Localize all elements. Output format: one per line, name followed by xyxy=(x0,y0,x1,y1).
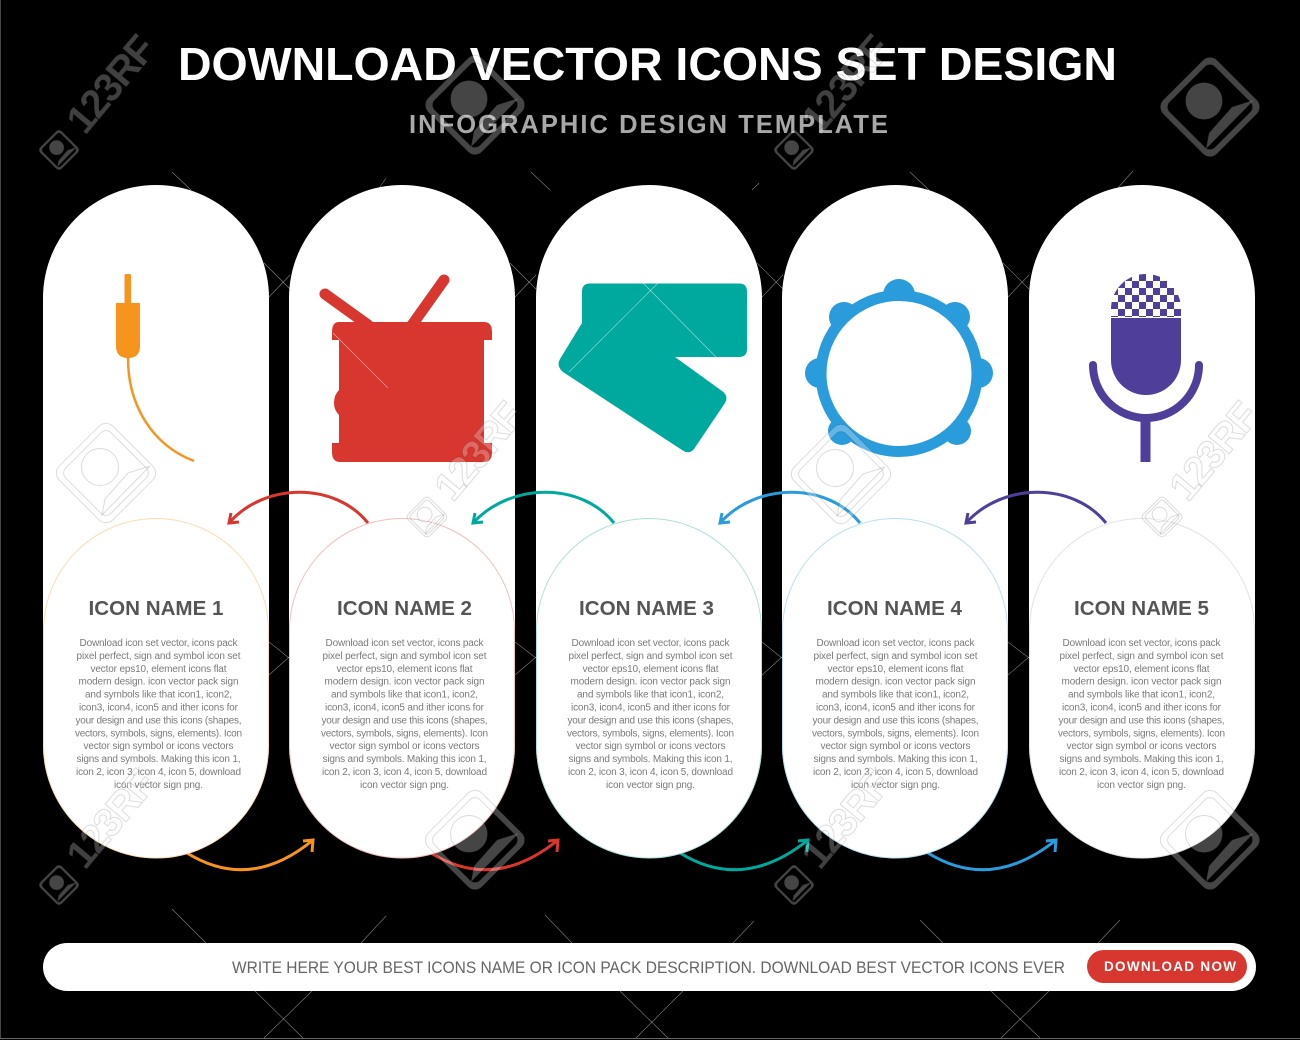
description 4: modern design. icon vector pack sign xyxy=(816,677,976,688)
description 1: icon vector sign png. xyxy=(114,780,203,791)
description 3: signs and symbols. Making this icon 1, xyxy=(568,754,732,765)
heading: icon name 4: ICON NAME 4 xyxy=(827,597,963,620)
subtitle: INFOGRAPHIC DESIGN TEMPLATE xyxy=(409,111,888,139)
description 1: icon3, icon4, icon5 and ither icons for xyxy=(79,702,239,714)
heading: icon name 2: ICON NAME 2 xyxy=(337,597,472,620)
description 2: vectors, symbols, signs, elements). Icon xyxy=(321,728,488,739)
watermark overlay: 123RF xyxy=(793,27,900,142)
description 4: icon vector sign png. xyxy=(851,780,940,791)
description 1 xyxy=(75,638,242,791)
description 3: vector eps10, element icons flat xyxy=(582,664,719,675)
footer bar xyxy=(43,943,1256,991)
description 3: vector sign symbol or icons vectors xyxy=(576,741,726,752)
footer text: WRITE HERE YOUR BEST ICONS NAME OR ICON PACK DESCRIPTION. DOWNLOAD BEST VECTOR ICONS EVER xyxy=(232,958,1065,977)
description 3: icon vector sign png. xyxy=(606,780,695,791)
description 3: icon 2, icon 3, icon 4, icon 5, download xyxy=(568,767,733,778)
description 4: icon 2, icon 3, icon 4, icon 5, download xyxy=(813,767,978,778)
description 5: vectors, symbols, signs, elements). Icon xyxy=(1058,728,1225,739)
description 1: modern design. icon vector pack sign xyxy=(78,677,238,688)
icon: teal tickets xyxy=(559,283,747,452)
description 2: icon vector sign png. xyxy=(360,780,449,791)
description 4: pixel perfect, sign and symbol icon set xyxy=(814,651,978,662)
description 4: icon3, icon4, icon5 and ither icons for xyxy=(816,702,976,714)
description 2: icon 2, icon 3, icon 4, icon 5, download xyxy=(322,767,487,778)
description 4: vector eps10, element icons flat xyxy=(828,664,964,675)
watermark overlay: 123RF xyxy=(58,27,165,142)
icon: tambourine xyxy=(805,279,993,452)
heading: icon name 3: ICON NAME 3 xyxy=(579,597,714,620)
icon: microphone xyxy=(1093,274,1199,462)
description 3: your design and use this icons (shapes, xyxy=(568,715,734,726)
description 4: signs and symbols. Making this icon 1, xyxy=(814,754,978,765)
description 2: icon3, icon4, icon5 and ither icons for xyxy=(325,702,485,714)
description 5: modern design. icon vector pack sign xyxy=(1062,677,1222,688)
arrow: bottom red xyxy=(431,840,558,870)
panel 2 xyxy=(289,185,515,858)
arrow: top purple xyxy=(966,492,1106,523)
description 5: vector eps10, element icons flat xyxy=(1074,664,1210,675)
arrow: bottom orange xyxy=(187,840,313,870)
description 1: vector eps10, element icons flat xyxy=(90,664,227,675)
description 1: vector sign symbol or icons vectors xyxy=(84,741,234,752)
title: DOWNLOAD VECTOR ICONS SET DESIGN xyxy=(178,38,1117,90)
description 3 xyxy=(567,638,734,791)
panel 1 xyxy=(43,185,269,858)
description 2: and symbols like that icon1, icon2, xyxy=(331,690,478,701)
description 5: icon vector sign png. xyxy=(1097,780,1186,791)
text card 2 xyxy=(290,518,514,858)
description 3: vectors, symbols, signs, elements). Icon xyxy=(567,728,734,739)
panel 3 xyxy=(536,185,762,858)
description 4: your design and use this icons (shapes, xyxy=(812,715,978,726)
description 2: vector sign symbol or icons vectors xyxy=(330,741,480,752)
download button: DOWNLOAD NOW xyxy=(1104,959,1236,974)
arrow: bottom teal xyxy=(680,840,808,870)
description 5: signs and symbols. Making this icon 1, xyxy=(1060,754,1224,765)
watermark overlay: 123RF xyxy=(58,762,165,877)
description 3: pixel perfect, sign and symbol icon set xyxy=(568,651,733,662)
description 5: vector sign symbol or icons vectors xyxy=(1066,741,1216,752)
description 1: your design and use this icons (shapes, xyxy=(76,715,242,726)
description 3: Download icon set vector, icons pack xyxy=(572,638,730,649)
description 2: pixel perfect, sign and symbol icon set xyxy=(322,651,487,662)
description 1: signs and symbols. Making this icon 1, xyxy=(76,754,240,765)
description 4: vector sign symbol or icons vectors xyxy=(820,741,970,752)
description 5: Download icon set vector, icons pack xyxy=(1062,638,1222,649)
description 5: your design and use this icons (shapes, xyxy=(1058,715,1224,726)
arrow: top blue xyxy=(720,492,860,523)
watermark overlay: 123RF xyxy=(426,394,533,509)
watermark overlay: 123RF xyxy=(793,762,900,877)
description 1: and symbols like that icon1, icon2, xyxy=(85,690,232,701)
download button xyxy=(1087,950,1247,983)
description 2: modern design. icon vector pack sign xyxy=(324,677,484,688)
arrow: bottom blue xyxy=(928,840,1056,870)
arrow: top teal xyxy=(473,492,614,523)
description 2: vector eps10, element icons flat xyxy=(336,664,473,675)
text card 1 xyxy=(44,518,268,858)
icon: drum xyxy=(325,280,492,462)
description 1: pixel perfect, sign and symbol icon set xyxy=(76,651,241,662)
text card 4 xyxy=(782,518,1008,858)
description 5: and symbols like that icon1, icon2, xyxy=(1068,690,1215,701)
description 5: pixel perfect, sign and symbol icon set xyxy=(1060,651,1224,662)
arrow: top red xyxy=(229,492,368,523)
description 4: Download icon set vector, icons pack xyxy=(816,638,976,649)
panel 4 xyxy=(782,185,1008,858)
description 5: icon 2, icon 3, icon 4, icon 5, download xyxy=(1059,767,1224,778)
description 3: and symbols like that icon1, icon2, xyxy=(577,690,724,701)
description 5: icon3, icon4, icon5 and ither icons for xyxy=(1062,702,1222,714)
description 1: vectors, symbols, signs, elements). Icon xyxy=(75,728,242,739)
description 1: icon 2, icon 3, icon 4, icon 5, download xyxy=(76,767,241,778)
text card 5 xyxy=(1030,518,1254,858)
description 5 xyxy=(1058,638,1225,791)
text card 3 xyxy=(536,518,762,858)
watermark overlay: 123RF xyxy=(1161,394,1268,509)
description 2 xyxy=(321,638,488,791)
description 1: Download icon set vector, icons pack xyxy=(80,638,238,649)
description 4: vectors, symbols, signs, elements). Icon xyxy=(812,728,979,739)
description 3: icon3, icon4, icon5 and ither icons for xyxy=(571,702,731,714)
description 3: modern design. icon vector pack sign xyxy=(570,677,730,688)
description 4: and symbols like that icon1, icon2, xyxy=(822,690,969,701)
description 2: signs and symbols. Making this icon 1, xyxy=(322,754,486,765)
panel 5 xyxy=(1029,185,1255,858)
heading: icon name 1: ICON NAME 1 xyxy=(88,597,224,620)
description 2: Download icon set vector, icons pack xyxy=(326,638,484,649)
icon: audio jack xyxy=(116,274,194,461)
description 4 xyxy=(812,638,979,791)
heading: icon name 5: ICON NAME 5 xyxy=(1074,597,1209,620)
description 2: your design and use this icons (shapes, xyxy=(322,715,488,726)
